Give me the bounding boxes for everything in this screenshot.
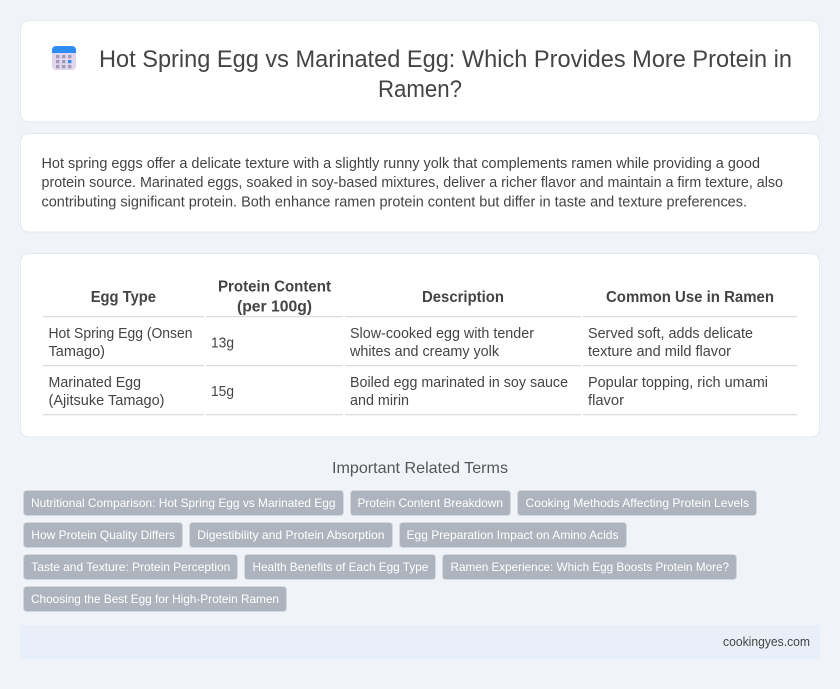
title xyxy=(99,46,792,103)
table row: marinated egg: Marinated Egg xyxy=(48,374,141,391)
panel: comparison table xyxy=(20,254,820,437)
tag: Choosing the Best Egg for High-Protein Ramen xyxy=(31,592,279,606)
table row: hot spring egg: texture and mild flavor xyxy=(588,343,731,360)
table row: marinated egg: (Ajitsuke Tamago) xyxy=(48,392,164,409)
tag xyxy=(190,522,392,548)
panel: header xyxy=(20,20,820,122)
panel: intro text xyxy=(20,134,820,232)
table row: hot spring egg: 13g xyxy=(211,334,234,352)
title: Ramen? xyxy=(378,76,462,103)
tag xyxy=(24,522,182,548)
table row: marinated egg: Popular topping, rich umami xyxy=(588,374,768,391)
tag: Health Benefits of Each Egg Type xyxy=(252,560,429,574)
table row: hot spring egg: Served soft, adds delicate xyxy=(588,325,753,342)
tag xyxy=(24,490,344,516)
tag: Nutritional Comparison: Hot Spring Egg vs Marinated Egg xyxy=(31,496,336,510)
table header row xyxy=(91,279,774,316)
tag xyxy=(518,490,756,516)
table row: hot spring egg: Hot Spring Egg (Onsen xyxy=(48,325,192,342)
table header row: Common Use in Ramen xyxy=(606,289,774,306)
tag xyxy=(350,490,510,516)
table row: hot spring egg: Slow-cooked egg with tender xyxy=(350,325,534,342)
tag: Protein Content Breakdown xyxy=(358,496,503,510)
footer source text: cookingyes.com xyxy=(723,635,810,649)
table row: hot spring egg: whites and creamy yolk xyxy=(349,343,499,360)
tag: How Protein Quality Differs xyxy=(31,528,175,542)
table row: hot spring egg: Tamago) xyxy=(48,343,105,360)
tag xyxy=(24,554,238,580)
tag: Egg Preparation Impact on Amino Acids xyxy=(406,528,618,542)
footer xyxy=(20,625,820,659)
text block: intro paragraph: Hot spring eggs offer a delicate texture with a slightly runny yolk that complements ramen while providing a good xyxy=(42,155,760,172)
table row: marinated egg: 15g xyxy=(211,383,234,400)
tag xyxy=(400,522,626,548)
table row: marinated egg: flavor xyxy=(588,392,624,409)
tag: Cooking Methods Affecting Protein Levels xyxy=(526,496,749,510)
icon: calendar xyxy=(52,46,76,70)
title: Hot Spring Egg vs Marinated Egg: Which Provides More Protein in xyxy=(99,46,792,73)
tag: Ramen Experience: Which Egg Boosts Protein More? xyxy=(450,560,729,574)
table row: marinated egg: and mirin xyxy=(350,392,409,409)
table header row: Protein Content xyxy=(218,279,332,296)
table header row: (per 100g) xyxy=(237,299,312,316)
related terms tags xyxy=(24,490,756,612)
tag: Digestibility and Protein Absorption xyxy=(197,528,384,542)
tag: Taste and Texture: Protein Perception xyxy=(31,560,230,574)
tag xyxy=(244,554,436,580)
table row: marinated egg xyxy=(48,374,768,409)
text block: intro paragraph xyxy=(42,155,783,210)
table row: marinated egg: Boiled egg marinated in soy sauce xyxy=(350,374,568,391)
table header row: Egg Type xyxy=(91,289,156,306)
table row: hot spring egg xyxy=(48,325,753,360)
heading: important related terms: Important Related Terms xyxy=(332,460,508,477)
tag xyxy=(442,554,736,580)
table header row: Description xyxy=(422,289,504,306)
text block: intro paragraph: protein source. Marinated eggs, soaked in soy-based mixtures, deliver a richer flavor and maintain a firm texture, also xyxy=(42,174,783,191)
text block: intro paragraph: contributing significant protein. Both enhance ramen protein content but differ in taste and texture preferences. xyxy=(42,194,747,210)
tag xyxy=(24,586,286,612)
